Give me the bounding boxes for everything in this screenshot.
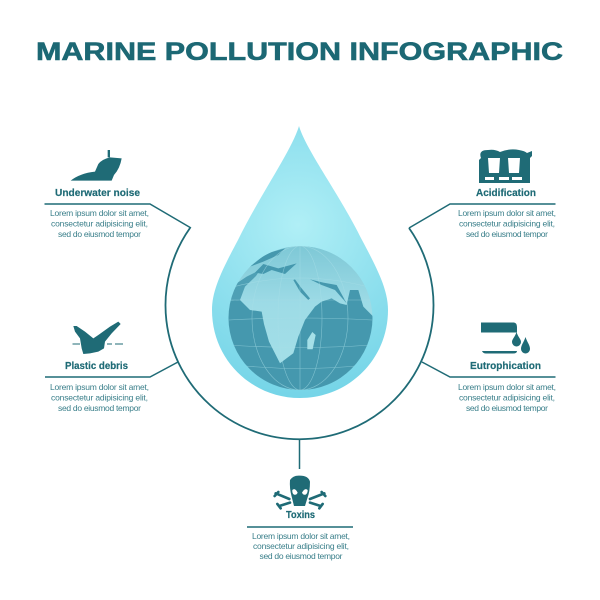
text: eutrophication: sed do eiusmod tempor bbox=[466, 403, 548, 413]
Madagascar bbox=[307, 332, 316, 349]
connector: eutrophication bbox=[422, 362, 556, 377]
text: eutrophication: consectetur adipisicing elit, bbox=[459, 392, 555, 402]
icon: bottles bbox=[73, 322, 121, 354]
heading: plastic debris: Plastic debris bbox=[65, 360, 128, 372]
graticule bbox=[229, 246, 372, 390]
Red Sea bbox=[293, 279, 310, 300]
globe bbox=[228, 246, 372, 390]
connector: acidification bbox=[409, 204, 556, 228]
icon: skull and crossbones bbox=[275, 476, 325, 508]
text: toxins: Lorem ipsum dolor sit amet, bbox=[252, 531, 350, 541]
text: underwater noise: consectetur adipisicing elit, bbox=[51, 218, 148, 228]
text: underwater noise: Lorem ipsum dolor sit amet, bbox=[50, 208, 149, 218]
panel: acidification bbox=[409, 149, 556, 239]
connector: plastic debris bbox=[45, 362, 178, 377]
icon: drain pipe bbox=[481, 322, 517, 332]
text: acidification: consectetur adipisicing elit, bbox=[459, 218, 555, 228]
panel: underwater noise bbox=[44, 150, 191, 239]
Europe bbox=[255, 263, 297, 274]
text: toxins: consectetur adipisicing elit, bbox=[253, 541, 349, 551]
text: toxins: sed do eiusmod tempor bbox=[260, 551, 343, 561]
icon: factory bbox=[479, 149, 532, 183]
water drop bbox=[212, 126, 388, 398]
icon: water surface bbox=[482, 351, 517, 354]
icon: drops bbox=[512, 332, 530, 354]
heading: eutrophication: Eutrophication bbox=[470, 360, 541, 372]
divider: toxins bbox=[247, 526, 353, 528]
icon: ship bbox=[71, 150, 122, 181]
icon: waterline bbox=[72, 343, 123, 345]
text: acidification: Lorem ipsum dolor sit amet, bbox=[458, 208, 556, 218]
Africa north dark coast bbox=[230, 272, 258, 301]
heading: toxins: Toxins bbox=[286, 509, 315, 521]
heading: acidification: Acidification bbox=[476, 187, 536, 199]
text: plastic debris: consectetur adipisicing elit, bbox=[51, 392, 148, 402]
connector ring bbox=[166, 228, 433, 439]
connector: underwater noise bbox=[44, 204, 191, 228]
text: plastic debris: Lorem ipsum dolor sit amet, bbox=[50, 382, 149, 392]
text: underwater noise: sed do eiusmod tempor bbox=[58, 229, 141, 239]
panel: eutrophication bbox=[422, 322, 556, 413]
panel: plastic debris bbox=[45, 322, 178, 413]
text: acidification: sed do eiusmod tempor bbox=[466, 229, 548, 239]
connector: toxins bbox=[298, 439, 300, 469]
text: eutrophication: Lorem ipsum dolor sit amet, bbox=[458, 382, 556, 392]
title: MARINE POLLUTION INFOGRAPHIC bbox=[36, 38, 563, 66]
panel: toxins bbox=[247, 439, 353, 561]
heading: underwater noise: Underwater noise bbox=[55, 187, 140, 199]
text: plastic debris: sed do eiusmod tempor bbox=[58, 403, 141, 413]
dark ocean and Asia bbox=[228, 290, 372, 390]
